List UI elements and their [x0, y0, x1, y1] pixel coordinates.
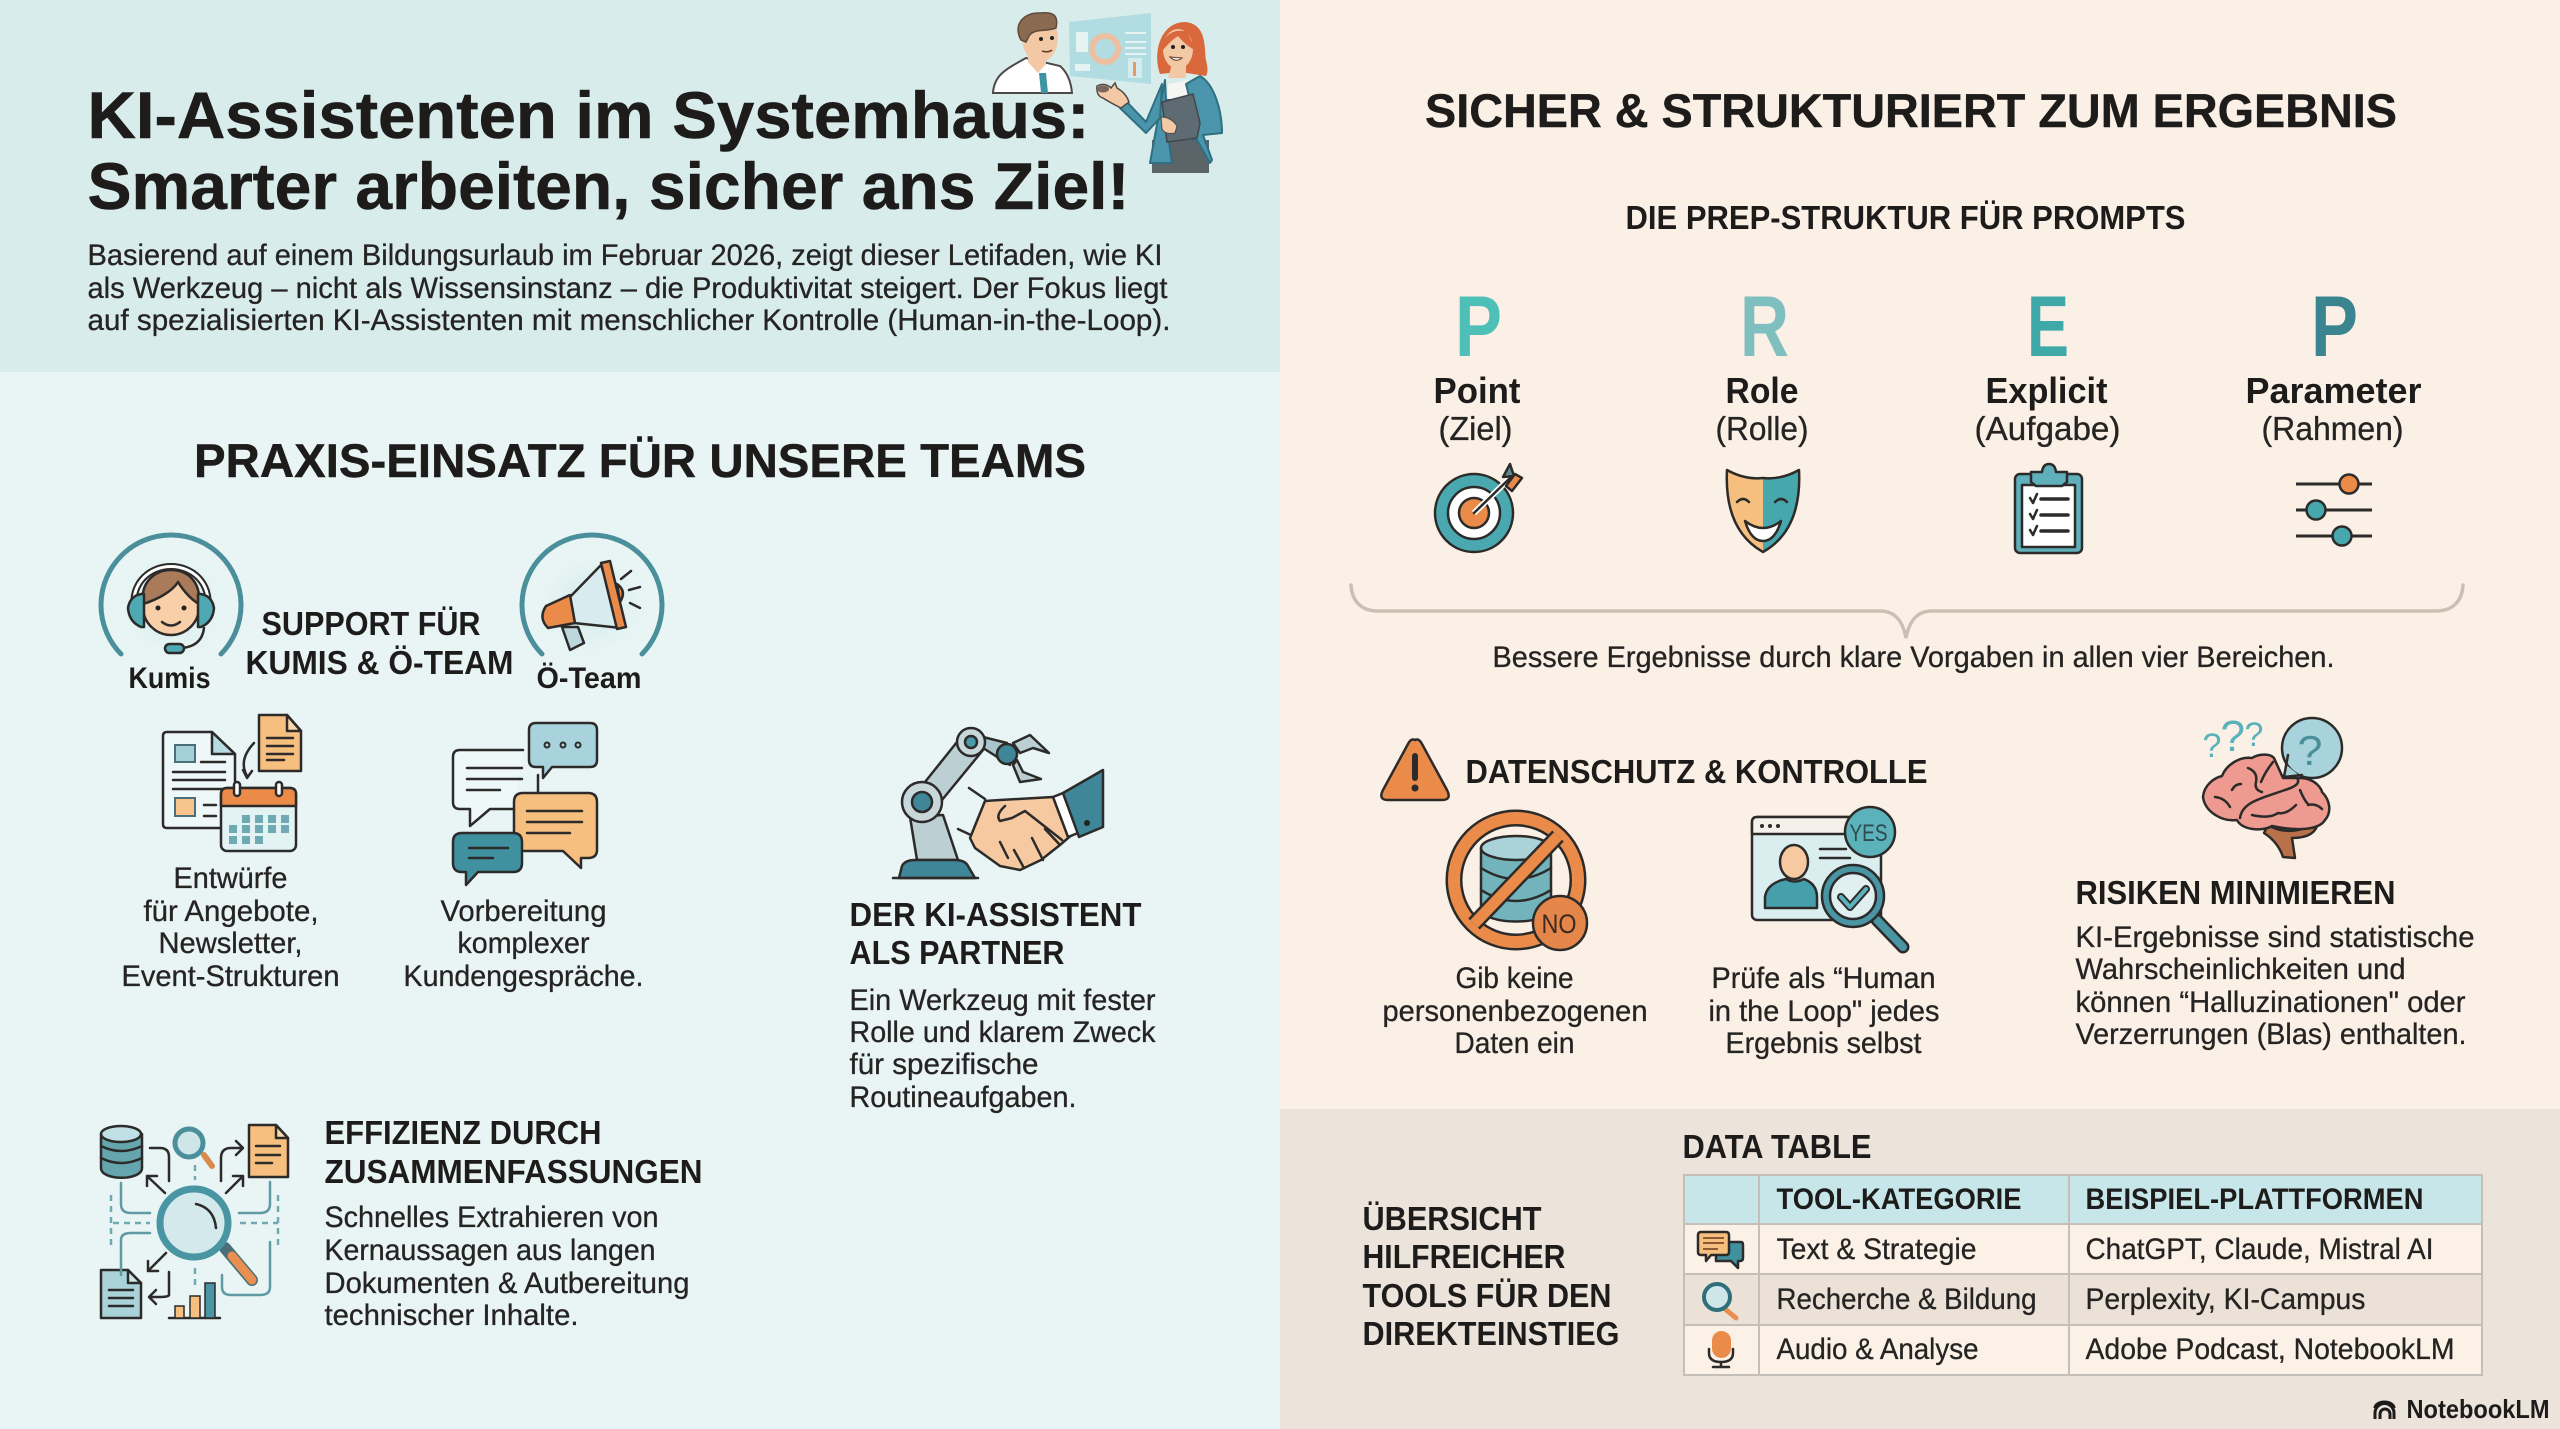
text: efficiency through summaries: Schnelles Extrahieren von	[324, 1201, 658, 1234]
PREP column: Point: Point	[1434, 370, 1521, 411]
heading: Support for Kumis and Ö-Team: SUPPORT FÜR	[262, 605, 481, 642]
heading: efficiency through summaries	[324, 1114, 702, 1190]
icon: warning triangle	[1381, 740, 1449, 800]
logo: NotebookLM: NotebookLM	[2406, 1394, 2550, 1424]
panel: header band	[0, 0, 1280, 372]
title	[88, 78, 1130, 223]
PREP column: Role: (Rolle)	[1716, 410, 1808, 447]
icon: sliders	[2296, 474, 2372, 546]
text: efficiency through summaries: technischer Inhalte.	[324, 1299, 578, 1332]
text: minimise risks: Verzerrungen (Blas) enthalten.	[2076, 1018, 2466, 1051]
icon: human review window: YES	[1850, 820, 1888, 847]
PREP column: Explicit: Explicit	[1986, 370, 2108, 411]
text: human in the loop: Ergebnis selbst	[1726, 1027, 1922, 1060]
label: Ö-Team: Ö-Team	[536, 662, 642, 695]
table: tool categories: ChatGPT, Claude, Mistral AI	[2086, 1233, 2434, 1266]
title: KI-Assistenten im Systemhaus:	[88, 78, 1090, 152]
label: Kumis: Kumis	[128, 662, 210, 695]
illustration: two colleagues with holographic screen	[993, 13, 1222, 173]
PREP column: Role: Role	[1726, 370, 1798, 411]
table: tool categories: Audio & Analyse	[1776, 1333, 1978, 1366]
text: customer meeting preparation	[404, 895, 644, 993]
text: human in the loop	[1708, 962, 1940, 1060]
text: drafts: Event-Strukturen	[122, 960, 340, 993]
text: efficiency through summaries: Kernaussagen aus langen	[324, 1234, 656, 1267]
text: AI assistant as partner	[850, 984, 1156, 1114]
icon: research magnifier	[1704, 1284, 1736, 1318]
table: tool categories: Adobe Podcast, NotebookLM	[2086, 1333, 2454, 1366]
panel: left column background	[0, 372, 1280, 1429]
icon: brain with question marks: ?	[2202, 727, 2221, 765]
text: no personal data	[1382, 962, 1648, 1060]
text: minimise risks: Wahrscheinlichkeiten und	[2076, 953, 2406, 986]
icon: no personal data	[1454, 818, 1587, 950]
heading: efficiency through summaries: ZUSAMMENFASSUNGEN	[324, 1153, 702, 1190]
icon: audio microphone	[1709, 1331, 1733, 1367]
table: tool categories: BEISPIEL-PLATTFORMEN	[2086, 1183, 2424, 1216]
heading: overview of helpful tools: TOOLS FÜR DEN	[1362, 1277, 1612, 1314]
heading: overview of helpful tools: DIREKTEINSTIEG	[1362, 1315, 1620, 1352]
text: human in the loop: Prüfe als “Human	[1712, 962, 1936, 995]
text: AI assistant as partner: Ein Werkzeug mit fester	[850, 984, 1156, 1017]
intro text: als Werkzeug – nicht als Wissensinstanz – die Produktivitat steigert. Der Fokus liegt	[88, 272, 1168, 305]
PREP column: Explicit	[1974, 279, 2120, 553]
icon: brain with question marks: ?	[2244, 716, 2263, 754]
text: drafts: Entwürfe	[174, 862, 288, 895]
table: tool categories: Recherche & Bildung	[1776, 1283, 2036, 1316]
intro text: auf spezialisierten KI-Assistenten mit menschlicher Kontrolle (Human-in-the-Loop).	[88, 304, 1170, 337]
text: minimise risks	[2076, 921, 2474, 1051]
panel: tools footer background	[1280, 1109, 2560, 1429]
text: drafts: Newsletter,	[158, 927, 302, 960]
heading: AI assistant as partner	[850, 896, 1142, 971]
intro text	[88, 239, 1170, 337]
text: efficiency through summaries: Dokumenten & Autbereitung	[324, 1267, 690, 1300]
PREP column: Point	[1434, 279, 1522, 552]
text: AI assistant as partner: für spezifische	[850, 1048, 1038, 1081]
table: tool categories: TOOL-KATEGORIE	[1776, 1183, 2022, 1216]
text: AI assistant as partner: Rolle und klarem Zweck	[850, 1016, 1156, 1049]
text: no personal data: Gib keine	[1456, 962, 1574, 995]
heading: data table: DATA TABLE	[1682, 1128, 1872, 1165]
text: no personal data: Daten ein	[1454, 1027, 1574, 1060]
heading: Support for Kumis and Ö-Team	[246, 605, 514, 681]
icon: robot arm shaking hands	[893, 728, 1103, 878]
heading: Praxis-Einsatz: PRAXIS-EINSATZ FÜR UNSERE TEAMS	[194, 434, 1086, 487]
text: drafts	[122, 862, 340, 993]
text: better results: Bessere Ergebnisse durch klare Vorgaben in allen vier Bereichen.	[1492, 641, 2334, 674]
icon: clipboard checklist	[2015, 464, 2082, 553]
intro text: Basierend auf einem Bildungsurlaub im Februar 2026, zeigt dieser Letifaden, wie KI	[88, 239, 1162, 272]
text: minimise risks: KI-Ergebnisse sind statistische	[2076, 921, 2474, 954]
panel: right column background	[1280, 0, 2560, 1109]
text: efficiency through summaries	[324, 1201, 690, 1332]
heading: safe and structured: SICHER & STRUKTURIERT ZUM ERGEBNIS	[1425, 84, 2397, 137]
heading: overview of helpful tools	[1362, 1200, 1620, 1352]
table: tool categories: Text & Strategie	[1776, 1233, 1976, 1266]
icon: Kumis support agent	[101, 535, 241, 673]
table: tool categories: Perplexity, KI-Campus	[2086, 1283, 2366, 1316]
heading: PREP structure: DIE PREP-STRUKTUR FÜR PROMPTS	[1626, 199, 2186, 236]
icon: brain with question marks: ?	[2220, 712, 2245, 761]
text: drafts: für Angebote,	[144, 895, 318, 928]
icon: chat bubbles	[453, 723, 597, 885]
text: no personal data: personenbezogenen	[1382, 995, 1648, 1028]
heading: AI assistant as partner: ALS PARTNER	[850, 934, 1065, 971]
PREP column: Point: (Ziel)	[1438, 410, 1512, 447]
PREP column: Parameter: P	[2311, 279, 2358, 375]
icon: theatre mask	[1727, 470, 1799, 552]
text: minimise risks: können “Halluzinationen" oder	[2076, 986, 2466, 1019]
PREP column: Explicit: E	[2027, 279, 2069, 375]
icon: documents and calendar	[163, 715, 301, 851]
heading: overview of helpful tools: HILFREICHER	[1362, 1238, 1566, 1275]
heading: overview of helpful tools: ÜBERSICHT	[1362, 1200, 1542, 1237]
PREP column: Role: R	[1740, 279, 1789, 375]
icon: brain with question marks	[2202, 712, 2342, 858]
icon: target with arrow	[1435, 464, 1522, 552]
icon: magnifier with data sources	[101, 1125, 288, 1318]
heading: AI assistant as partner: DER KI-ASSISTENT	[850, 896, 1142, 933]
PREP column: Explicit: (Aufgabe)	[1974, 410, 2120, 447]
table: tool categories	[1684, 1175, 2482, 1375]
PREP column: Parameter: (Rahmen)	[2262, 410, 2404, 447]
text: human in the loop: in the Loop" jedes	[1708, 995, 1940, 1028]
title: Smarter arbeiten, sicher ans Ziel!	[88, 149, 1130, 223]
icon: text and strategy chat	[1698, 1232, 1743, 1268]
icon: Ö-Team megaphone	[522, 535, 662, 673]
text: AI assistant as partner: Routineaufgaben.	[850, 1081, 1076, 1114]
icon: brain with question marks: ?	[2298, 727, 2322, 774]
icon: human review window	[1752, 807, 1903, 947]
heading: minimise risks: RISIKEN MINIMIEREN	[2076, 874, 2396, 911]
PREP column: Point: P	[1455, 279, 1502, 375]
PREP column: Parameter	[2246, 279, 2422, 546]
brace: grouping PREP elements	[1351, 585, 2463, 638]
heading: Support for Kumis and Ö-Team: KUMIS & Ö-TEAM	[246, 644, 514, 681]
PREP column: Role	[1716, 279, 1808, 552]
heading: data protection and control: DATENSCHUTZ & KONTROLLE	[1466, 753, 1928, 790]
text: customer meeting preparation: Kundengespräche.	[404, 960, 644, 993]
heading: efficiency through summaries: EFFIZIENZ DURCH	[324, 1114, 602, 1151]
text: customer meeting preparation: komplexer	[458, 927, 590, 960]
PREP column: Parameter: Parameter	[2246, 370, 2422, 411]
icon: no personal data: NO	[1542, 909, 1576, 939]
text: customer meeting preparation: Vorbereitung	[440, 895, 606, 928]
